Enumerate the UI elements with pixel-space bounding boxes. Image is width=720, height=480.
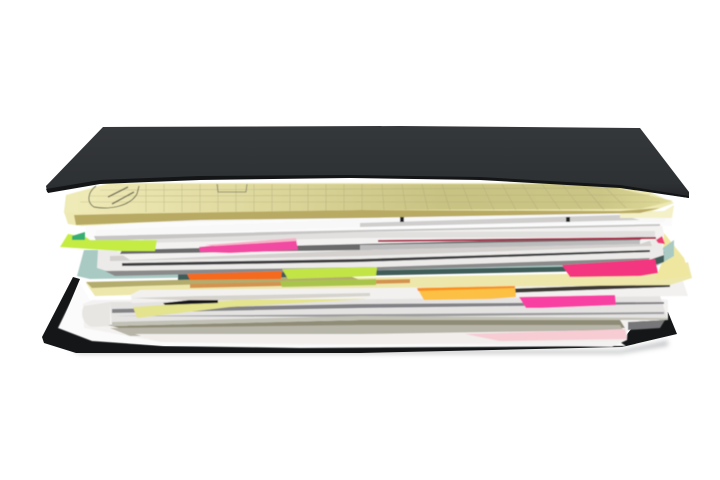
sticky tab: green dark corner (72, 232, 85, 240)
sticky tab: lime left (60, 234, 157, 251)
sticky tab: pink upper (199, 239, 298, 253)
white back page (58, 283, 626, 348)
sticky tab: orange (187, 271, 282, 280)
yellow top pad (64, 183, 674, 226)
teal sheet (77, 240, 674, 279)
top cover (46, 126, 689, 198)
yellow lower pad (86, 233, 692, 296)
sticky tab: pink right (562, 259, 658, 277)
small pink mark (656, 236, 665, 244)
back cover (42, 277, 677, 353)
pale grey sheets (97, 232, 664, 276)
upper white sheets (85, 205, 674, 260)
paper stack (58, 183, 692, 348)
bottom sheets (82, 296, 668, 347)
handwritten sketch (89, 186, 139, 208)
grid lines on pad (80, 184, 660, 212)
middle white sheets (110, 278, 688, 326)
small black clips (400, 217, 570, 222)
sticky tab: yellow-orange (417, 286, 516, 300)
sticky tab: pink lower (519, 295, 616, 308)
ground shadow (70, 340, 668, 354)
sticky tab: lime middle (282, 267, 377, 279)
